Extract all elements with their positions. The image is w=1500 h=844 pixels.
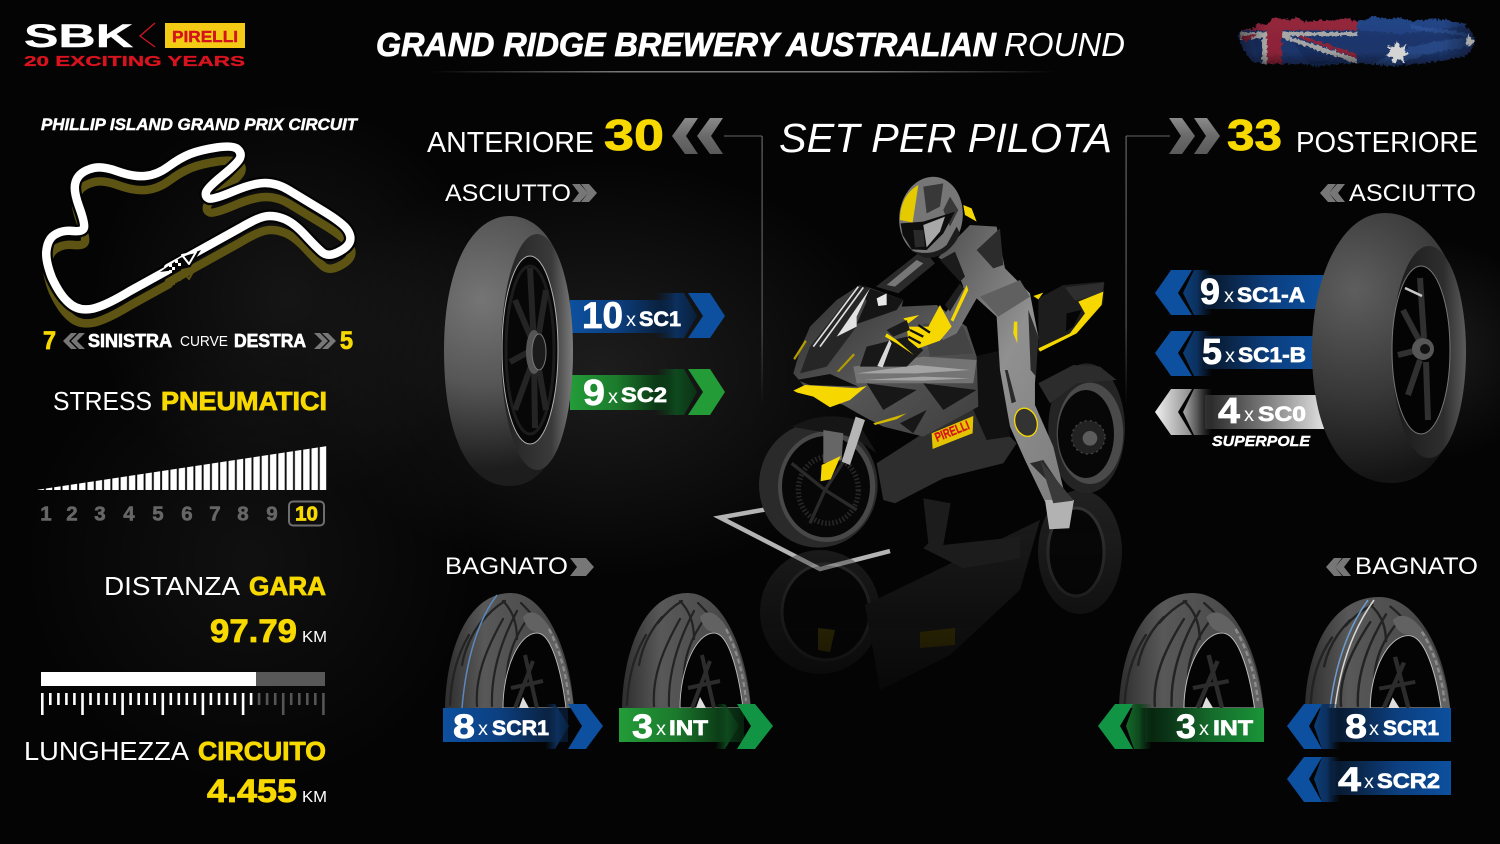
chart: stress scale numbers: 6: [181, 502, 193, 526]
chart: stress scale numbers: 3: [94, 502, 106, 526]
logo: anniversary tagline: 20 EXCITING YEARS: [24, 53, 245, 70]
chart: stress scale numbers: 2: [66, 502, 78, 526]
bike: stand: [923, 498, 1020, 568]
badge: 4 x SC0: 4: [1218, 390, 1240, 431]
heading: set per pilota: SET PER PILOTA: [779, 115, 1112, 161]
badge: 4 x SCR2 rear: x: [1364, 772, 1375, 793]
logo: SBK wordmark: SBK: [24, 18, 133, 54]
icon: front wet tyre INT: [622, 593, 751, 708]
bike: fairing graphics: [793, 285, 977, 433]
chart: distance progress bar: [41, 672, 325, 686]
heading: rear tyres: POSTERIORE: [1296, 127, 1478, 159]
tread stripes: [1330, 600, 1368, 708]
heading: circuit length: CIRCUITO: [198, 736, 326, 766]
logo: Pirelli badge: [165, 23, 245, 48]
heading: race distance: GARA: [249, 571, 326, 601]
badge: 9 x SC2: x: [608, 387, 619, 408]
reflection: front wheel: [760, 550, 878, 662]
badge: 8 x SCR1 front: 8: [453, 708, 475, 746]
value: circuit length: 4.455: [207, 773, 297, 809]
badge: 8 x SCR1 rear: SCR1: [1383, 717, 1439, 740]
reflection: sponsor plate: [920, 628, 955, 648]
text: curves count: 5: [340, 327, 353, 355]
label: superpole: SUPERPOLE: [1212, 433, 1311, 450]
badge: 9 x SC2: SC2: [621, 384, 667, 407]
badge: 5 x SC1-B: SC1-B: [1238, 344, 1306, 367]
icon: seven-point star: [1386, 41, 1409, 64]
badge: 8 x SCR1 rear: 8: [1345, 708, 1367, 746]
rider: suit: [932, 225, 1073, 502]
badge: 4 x SC0: [1155, 389, 1325, 450]
heading: front tyres: ANTERIORE: [427, 127, 594, 159]
title: ROUND: [1004, 26, 1125, 63]
text: curves count: 7: [43, 327, 56, 355]
bike: rear wheel: [1038, 363, 1125, 493]
heading: stress: [53, 386, 327, 416]
panel: tyre stress: [36, 386, 328, 526]
bike: front wheel: [759, 416, 878, 548]
badge: 9 x SC1-A: [1155, 270, 1325, 315]
heading: circuit length: [24, 736, 326, 766]
badge: 4 x SC0: SC0: [1258, 403, 1306, 426]
icon: front dry tyre: [444, 216, 573, 486]
badge: 9 x SC1-A: SC1-A: [1237, 284, 1305, 307]
badge: 4 x SC0: x: [1244, 405, 1255, 426]
icon: front wet tyre SCR1: [445, 593, 574, 708]
chart: stress scale numbers: 5: [152, 502, 164, 526]
rider: glove: [885, 305, 952, 355]
heading: race distance: [104, 571, 326, 601]
badge: 8 x SCR1 front: [443, 704, 603, 749]
text: curves count: DESTRA: [234, 331, 306, 351]
icon: Australian flag: [1237, 16, 1476, 68]
badge: 4 x SCR2 rear: 4: [1338, 761, 1361, 799]
badge: 3 x INT rear: 3: [1176, 708, 1196, 746]
value: race distance: [210, 613, 327, 649]
chart: stress scale numbers: 4: [123, 502, 135, 526]
callout: stress value 10: 10: [295, 502, 318, 526]
heading: race distance: DISTANZA: [104, 571, 241, 601]
badge: 10 x SC1: SC1: [639, 308, 681, 331]
heading: front tyres: 30: [604, 111, 664, 160]
panel: race distance: [41, 571, 327, 715]
icon: double chevron left: [672, 118, 723, 154]
text: curves count: CURVE: [180, 334, 228, 350]
icon: rear wet tyre INT: [1119, 593, 1263, 708]
bike reflection: [760, 490, 1122, 662]
text: curves count: [43, 327, 353, 355]
rider: suit graphics: [940, 228, 1074, 529]
bike: main fairing: [793, 285, 978, 437]
badge: 9 x SC2: 9: [583, 372, 605, 413]
chart: stress scale numbers: 9: [266, 502, 278, 526]
badge: 3 x INT front: [619, 704, 773, 749]
bike: front wing: [793, 385, 867, 407]
reflection: rear wheel: [1038, 490, 1122, 614]
heading: circuit length: LUNGHEZZA: [24, 736, 190, 766]
label: front dry: ASCIUTTO: [445, 180, 571, 207]
badge: 3 x INT front: 3: [632, 708, 653, 746]
chart: stress scale numbers: [40, 502, 278, 526]
logo: SBK and Pirelli: [24, 18, 245, 70]
label: rear wet: BAGNATO: [1355, 553, 1478, 580]
heading: stress: STRESS: [53, 386, 152, 416]
bike: fork and fender: [821, 417, 865, 481]
panel: circuit: [41, 116, 359, 355]
badge: 3 x INT front: x: [656, 719, 667, 740]
badge: 3 x INT rear: INT: [1213, 717, 1253, 740]
chart: ruler ticks: [42, 693, 323, 715]
chart: stress scale numbers: 7: [209, 502, 221, 526]
badge: 4 x SCR2 rear: SCR2: [1377, 770, 1440, 793]
badge: 8 x SCR1 front: x: [478, 719, 489, 740]
badge: 5 x SC1-B: x: [1225, 346, 1236, 367]
icon: rear dry tyre: [1312, 213, 1466, 483]
bike: sponsor plate: [932, 416, 973, 449]
icon: double chevron right: [1169, 118, 1220, 154]
tread stripes: [462, 595, 497, 708]
badge: 3 x INT rear: x: [1199, 719, 1210, 740]
chart: stress scale numbers: 8: [237, 502, 249, 526]
title: GRAND RIDGE BREWERY AUSTRALIAN: [376, 26, 997, 63]
badge: 9 x SC1-A: 9: [1200, 271, 1220, 312]
sponsor text on the bike plate: PIRELLI: [933, 417, 972, 445]
chart: stress ramp bars: [36, 446, 328, 490]
illustration: rider and motorcycle: [759, 173, 1125, 568]
callout: stress value 10: [289, 502, 324, 526]
chart: track map: [46, 147, 351, 323]
label: rear dry: ASCIUTTO: [1349, 180, 1476, 207]
chart: stress scale numbers: 1: [40, 502, 52, 526]
label: front wet: BAGNATO: [445, 553, 568, 580]
bike: engine: [973, 350, 1010, 440]
logo: red chevron: [140, 23, 155, 47]
badge: 8 x SCR1 rear: [1287, 704, 1451, 749]
heading: circuit name: PHILLIP ISLAND GRAND PRIX CIRCUIT: [41, 116, 359, 134]
icon: rear wet tyre SCR1: [1305, 597, 1450, 708]
heading: stress: PNEUMATICI: [161, 386, 327, 416]
rider: far arm: [876, 249, 935, 293]
reflection: fairing: [865, 520, 1040, 650]
badge: 3 x INT front: INT: [669, 717, 708, 740]
value: circuit length: [207, 773, 327, 809]
value: race distance: 97.79: [210, 613, 297, 649]
badge: 3 x INT rear: [1098, 704, 1264, 749]
badge: 5 x SC1-B: [1155, 331, 1325, 376]
badge: 8 x SCR1 front: SCR1: [492, 717, 549, 740]
logo: Pirelli badge: PIRELLI: [172, 29, 238, 46]
panel: circuit length: [24, 736, 327, 809]
icon: start line marker: [160, 250, 201, 285]
badge: 9 x SC1-A: x: [1224, 286, 1235, 307]
badge: 10 x SC1: x: [626, 310, 637, 331]
value: circuit length: KM: [302, 789, 327, 806]
value: race distance: KM: [302, 629, 327, 646]
rider: helmet: [894, 173, 977, 261]
reflection: fender: [818, 628, 835, 652]
badge: 5 x SC1-B: 5: [1202, 331, 1222, 372]
heading: front tyres: [427, 111, 723, 160]
heading: rear tyres: 33: [1227, 111, 1282, 160]
badge: 9 x SC2: [570, 369, 725, 415]
badge: 4 x SCR2 rear: [1287, 757, 1451, 802]
badge: 10 x SC1: [570, 293, 725, 338]
badge: 8 x SCR1 rear: x: [1369, 719, 1380, 740]
icon: parking box on floor: [720, 510, 890, 569]
bike: tail: [1033, 282, 1104, 352]
heading: rear tyres: [1169, 111, 1478, 160]
connector lines: [724, 136, 1170, 406]
badge: 10 x SC1: 10: [582, 295, 623, 336]
bike: lower fairing: [877, 403, 1017, 503]
title: [376, 26, 1125, 72]
text: curves count: SINISTRA: [88, 331, 172, 351]
